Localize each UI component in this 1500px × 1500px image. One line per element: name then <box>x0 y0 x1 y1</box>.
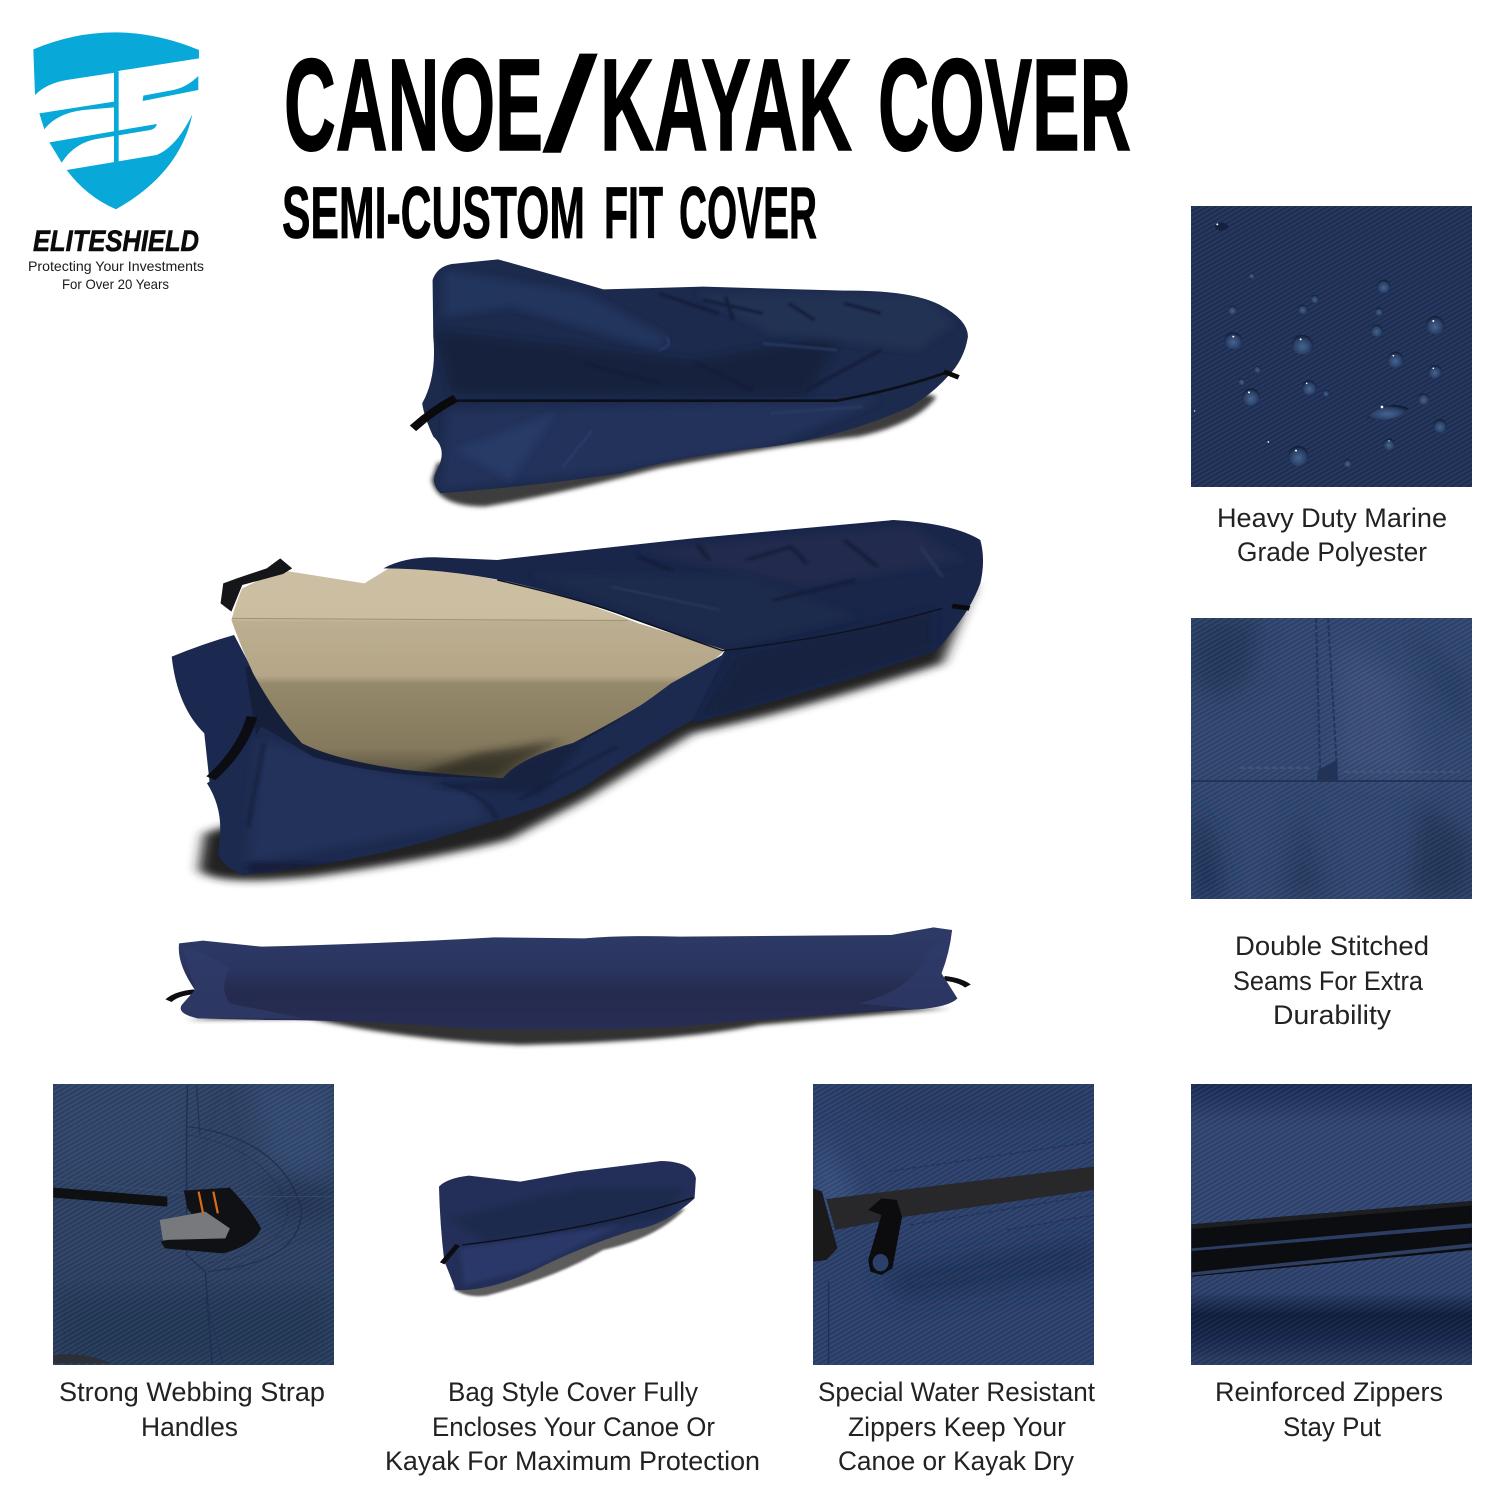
title <box>284 31 1131 178</box>
zipper <box>454 373 944 401</box>
open cover flap <box>207 653 725 875</box>
kayak hull <box>226 567 731 780</box>
cover over stern <box>383 520 983 723</box>
product photo: fully closed cover on canoe <box>169 927 968 1045</box>
caption: Strong Webbing Strap <box>59 1377 325 1407</box>
caption: Stay Put <box>1283 1412 1381 1442</box>
logo: EliteShield shield and tagline <box>28 32 204 292</box>
icon: blue shield <box>33 32 199 209</box>
title: / <box>545 31 596 178</box>
swatch: zipper with pull <box>813 1084 1094 1365</box>
subtitle: COVER <box>679 173 817 254</box>
zipper edge <box>497 580 942 651</box>
brand name: ELITESHIELD <box>33 225 199 258</box>
caption: Kayak For Maximum Protection <box>385 1446 760 1476</box>
caption <box>1215 1377 1443 1442</box>
rear flap <box>172 635 275 783</box>
panel: heavy duty polyester swatch <box>1191 206 1472 567</box>
subtitle: FIT <box>604 173 663 254</box>
tagline: For Over 20 Years <box>62 276 169 292</box>
strap handle <box>211 717 252 778</box>
panel: double stitched seams swatch <box>1191 618 1472 1030</box>
caption: Reinforced Zippers <box>1215 1377 1443 1407</box>
product photo: zipped bag cover, side view <box>413 259 968 507</box>
product photo: cover unzipped on kayak <box>172 520 983 880</box>
tagline: Protecting Your Investments <box>28 258 204 274</box>
strap loop <box>161 1188 261 1253</box>
swatch: fabric with water droplets <box>1191 206 1472 487</box>
panel: webbing strap handles swatch <box>53 1084 334 1442</box>
cover body <box>422 259 968 493</box>
zipper end tab <box>813 1188 837 1262</box>
ground shadow <box>187 1007 949 1045</box>
caption <box>1217 503 1447 567</box>
title: CANOE <box>284 31 543 178</box>
cover body <box>179 927 957 1030</box>
stitching <box>888 1142 1094 1230</box>
strap handles <box>169 978 968 1001</box>
product photo: small bag cover <box>439 1161 696 1296</box>
caption: Durability <box>1273 1000 1392 1030</box>
swatch: fabric with seams <box>1191 618 1472 899</box>
caption <box>59 1377 325 1442</box>
caption: Grade Polyester <box>1237 537 1427 567</box>
panel: reinforced zippers swatch <box>1191 1084 1472 1442</box>
strap handles <box>413 398 456 428</box>
zipper teeth and tape <box>1192 1201 1472 1277</box>
zipper tape <box>826 1167 1094 1230</box>
zipper line <box>53 1188 167 1207</box>
caption <box>385 1377 760 1476</box>
caption: Seams For Extra <box>1233 966 1424 996</box>
water droplets <box>1194 223 1447 467</box>
panel: bag style cover <box>385 1161 760 1476</box>
swatch: reinforced zipper <box>1191 1084 1472 1365</box>
seams <box>1316 618 1320 770</box>
swatch: strap handle close-up <box>53 1084 334 1365</box>
title: COVER <box>878 31 1131 178</box>
title: KAYAK <box>600 31 852 178</box>
caption: Bag Style Cover Fully <box>448 1377 698 1407</box>
kayak toggle handle <box>221 558 292 612</box>
caption <box>818 1377 1095 1476</box>
caption: Double Stitched <box>1235 931 1429 961</box>
caption: Canoe or Kayak Dry <box>838 1446 1074 1476</box>
caption: Handles <box>141 1412 238 1442</box>
caption: Special Water Resistant <box>818 1377 1095 1407</box>
tagline <box>28 258 204 292</box>
ground shadow <box>199 583 975 880</box>
cover interior <box>245 650 725 782</box>
caption: Heavy Duty Marine <box>1217 503 1447 533</box>
stitched seams <box>187 1085 212 1363</box>
ground shadow <box>431 383 936 507</box>
zipper pull <box>868 1198 902 1275</box>
subtitle: SEMI-CUSTOM <box>282 173 585 254</box>
webbing <box>160 1212 230 1240</box>
caption: Zippers Keep Your <box>848 1412 1066 1442</box>
caption: Encloses Your Canoe Or <box>432 1412 715 1442</box>
caption <box>1233 931 1429 1030</box>
panel: water resistant zippers swatch <box>813 1084 1095 1476</box>
